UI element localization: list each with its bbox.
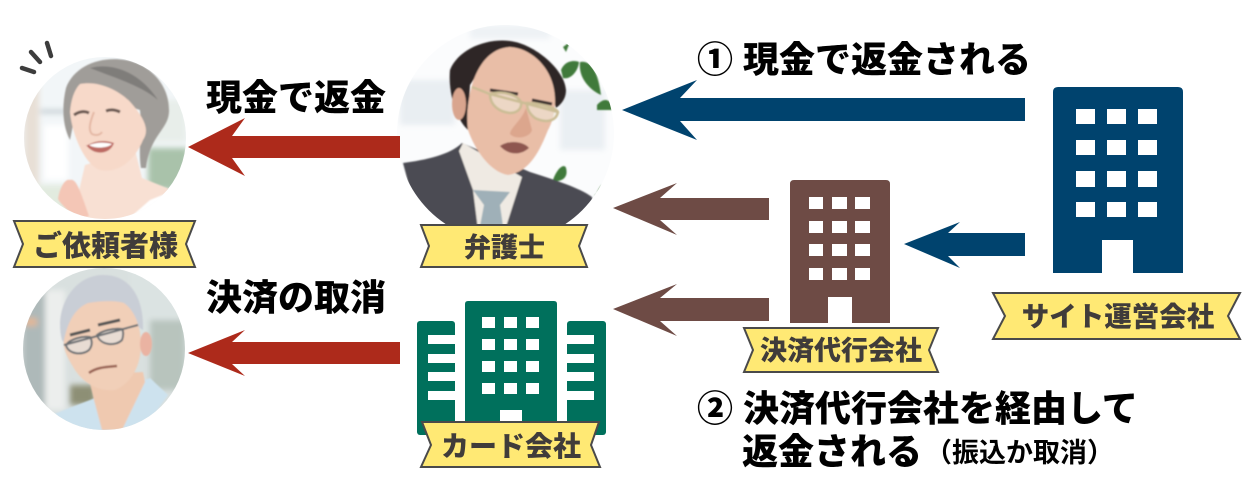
ribbon: payment agent label: 決済代行会社 <box>760 336 922 366</box>
heading: route 2: 決済代行会社を経由して <box>743 388 1138 429</box>
arrow: payment agent to lawyer <box>613 183 769 235</box>
lawyer suit <box>402 142 593 224</box>
icon: card company building <box>417 301 606 435</box>
heading: cancel payment: 決済の取消 <box>206 277 386 318</box>
man glasses <box>64 325 138 353</box>
woman hands <box>58 180 89 219</box>
arrow: site operator to payment agent <box>904 222 1025 268</box>
ribbon: card company label: カード会社 <box>441 431 581 462</box>
heading: route 2 <box>697 388 1138 472</box>
ribbon: lawyer label <box>421 225 587 267</box>
arrow: site operator to lawyer <box>622 80 1025 140</box>
photo: client woman <box>24 57 190 222</box>
man brows <box>70 320 120 335</box>
man hair <box>60 275 143 345</box>
heading: route 1: 現金で返金される <box>743 39 1031 80</box>
heading: refund in cash: 現金で返金 <box>206 77 386 118</box>
man clothes <box>54 378 168 432</box>
man face <box>64 301 141 390</box>
woman face <box>70 83 146 171</box>
heading: route 1: ① <box>697 39 733 80</box>
heading: route 2: 返金される <box>742 431 922 472</box>
ribbon: card company label <box>421 422 600 467</box>
heading: route 2: （振込か取消） <box>925 438 1114 468</box>
lawyer glasses <box>472 87 558 121</box>
arrow: payment agent to card company <box>613 284 769 336</box>
lawyer tie <box>473 190 510 226</box>
ribbon: client label: ご依頼者様 <box>33 229 178 263</box>
man neck <box>88 372 145 430</box>
arrow: lawyer to client <box>188 118 400 176</box>
ribbon: lawyer label: 弁護士 <box>464 233 545 263</box>
woman hair <box>63 59 169 168</box>
photo: lawyer <box>398 25 612 224</box>
icon: emphasis marks <box>22 43 51 72</box>
woman neck and chest <box>79 154 168 219</box>
arrow: card company to man <box>188 330 400 376</box>
ribbon: client label <box>14 221 195 267</box>
icon: payment agent building <box>790 180 890 323</box>
ribbon: site operator label <box>993 293 1240 339</box>
ribbon: payment agent label <box>744 328 938 372</box>
lawyer shirt <box>459 143 522 230</box>
lawyer face <box>467 47 555 175</box>
photo: man customer <box>23 268 185 432</box>
lawyer ear <box>452 88 466 120</box>
lawyer hair <box>450 41 566 130</box>
ribbon: site operator label: サイト運営会社 <box>1022 301 1215 332</box>
heading: route 2: ② <box>697 388 733 429</box>
lawyer plants <box>553 42 612 196</box>
icon: site operator building <box>1053 87 1183 273</box>
